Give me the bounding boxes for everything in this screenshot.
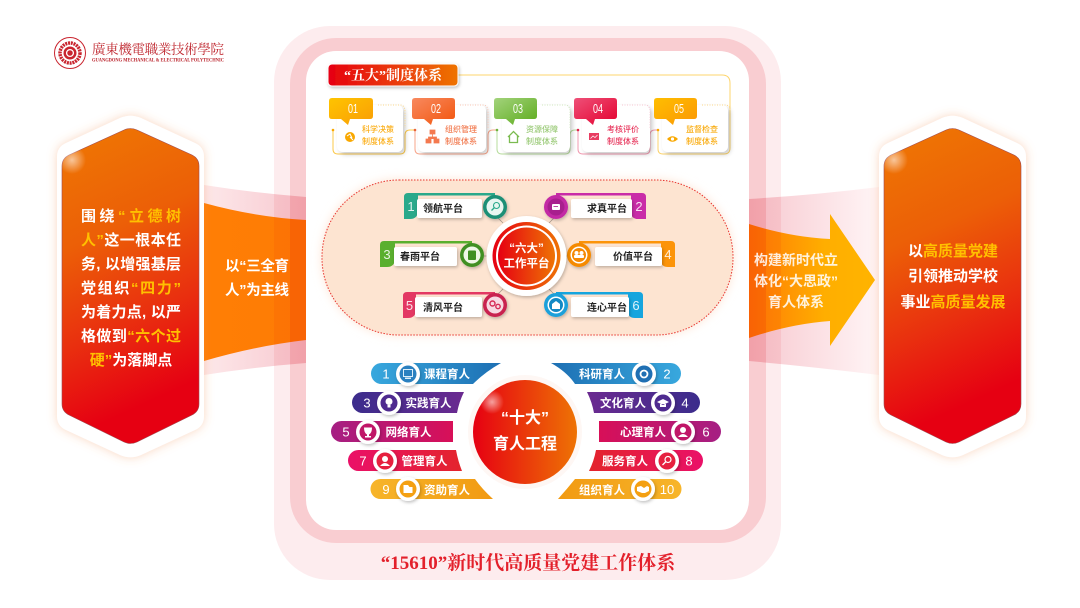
left panel text: 围绕“立德树	[81, 207, 181, 225]
right panel text	[900, 242, 1006, 311]
right arrow text: 构建新时代立	[754, 252, 838, 268]
project 3: 3	[363, 396, 371, 410]
platform 6: 6	[632, 298, 640, 313]
logo: GUANGDONG MECHANICAL & ELECTRICAL POLYTECHNIC	[92, 58, 224, 64]
right arrow text: 育人体系	[768, 294, 824, 310]
project 9	[370, 477, 493, 501]
platform 3	[380, 241, 484, 267]
card 04	[574, 98, 658, 154]
panel: five systems	[328, 64, 730, 154]
heading: five systems	[328, 64, 458, 86]
project 1	[371, 362, 501, 386]
connector line	[458, 75, 730, 154]
project 7: 管理育人	[402, 454, 448, 468]
card 03	[494, 98, 578, 154]
card 03: 制度体系	[526, 136, 558, 146]
project 8: 8	[685, 454, 693, 468]
platform 5: 5	[406, 298, 413, 313]
project 8: 服务育人	[602, 454, 648, 468]
project 6: 6	[702, 424, 710, 440]
hub connectors	[484, 212, 567, 300]
platform 1	[404, 193, 507, 219]
left band text: 以“三全育	[225, 257, 289, 275]
left panel text: 务, 以增强基层	[81, 255, 181, 273]
card 04: 制度体系	[607, 136, 639, 146]
right panel text: 引领推动学校	[908, 267, 998, 285]
left band text: 人”为主线	[225, 281, 290, 299]
project 5: 5	[342, 424, 350, 440]
left panel text	[81, 207, 181, 369]
platform 6: 连心平台	[587, 301, 627, 314]
project 4: 文化育人	[600, 396, 646, 410]
center hub: 工作平台	[504, 256, 550, 270]
card 01: 制度体系	[362, 136, 394, 146]
panel: six platforms	[322, 180, 733, 335]
project 2: 科研育人	[579, 367, 625, 381]
project 9: 资助育人	[424, 483, 470, 497]
logo	[54, 38, 224, 68]
platform 2: 求真平台	[587, 202, 627, 215]
project 4	[587, 391, 700, 415]
project 10	[558, 477, 682, 501]
central frame	[274, 26, 781, 580]
project 6: 心理育人	[620, 425, 666, 439]
platform 3: 3	[383, 247, 391, 262]
project 6	[599, 420, 721, 444]
card 01: 01	[348, 101, 358, 116]
right arrow text	[754, 252, 838, 310]
card 05: 05	[674, 101, 684, 116]
project 7: 7	[359, 454, 367, 468]
right panel text: 事业高质量发展	[900, 293, 1006, 311]
heading: five systems: “五大”制度体系	[344, 67, 443, 84]
card 02	[412, 98, 498, 154]
project 10: 组织育人	[579, 483, 625, 497]
project 3: 实践育人	[406, 396, 452, 410]
right panel text: 以高质量党建	[908, 242, 998, 260]
platform 4	[567, 241, 675, 267]
project 5: 网络育人	[386, 425, 432, 439]
right arrow text: 体化“大思政”	[754, 273, 838, 289]
card 01: 科学决策	[362, 124, 394, 134]
project 2	[551, 362, 681, 386]
project 3	[352, 391, 464, 415]
platform 2: 2	[635, 199, 643, 214]
center hub: “十大”	[501, 409, 549, 427]
platform 2	[544, 193, 646, 219]
project 4: 4	[681, 396, 689, 410]
center hub	[486, 216, 566, 296]
left panel text: 党组织“四力”	[81, 280, 181, 297]
card 02: 02	[431, 101, 441, 116]
project 10: 10	[660, 482, 674, 497]
project 7	[348, 449, 462, 473]
platform 3: 春雨平台	[400, 250, 440, 263]
project 2: 2	[663, 366, 671, 382]
left band text	[225, 257, 290, 299]
card 02: 制度体系	[445, 136, 477, 146]
left panel text: 为着力点, 以严	[81, 303, 181, 321]
card 03: 资源保障	[526, 124, 558, 134]
card 05: 监督检查	[686, 124, 718, 134]
platform 1: 1	[407, 199, 415, 214]
card 02: 组织管理	[445, 124, 477, 134]
platform 5	[403, 292, 507, 318]
card 03: 03	[513, 101, 523, 116]
platform 4: 价值平台	[613, 250, 653, 263]
project 9: 9	[382, 482, 390, 497]
card 01	[329, 98, 415, 154]
card 05: 制度体系	[686, 136, 718, 146]
center hub: 育人工程	[493, 434, 557, 453]
platform 4: 4	[664, 247, 672, 262]
right arrow band	[749, 187, 879, 375]
project 5	[331, 420, 453, 444]
card 04: 04	[593, 101, 603, 116]
title: “15610”新时代高质量党建工作体系	[381, 551, 676, 574]
platform 1: 领航平台	[423, 202, 463, 215]
left connector band	[204, 185, 306, 375]
panel: ten projects	[331, 362, 721, 501]
project 8	[589, 449, 703, 473]
center hub	[460, 367, 590, 497]
right hexagon panel	[879, 116, 1026, 457]
left panel text: 格做到“六个过	[81, 327, 181, 345]
card 05	[654, 98, 730, 154]
left hexagon panel	[57, 116, 204, 457]
platform 5: 清风平台	[423, 301, 463, 314]
project 1: 课程育人	[424, 367, 470, 381]
logo: 廣東機電職業技術學院	[92, 38, 224, 58]
left panel text: 人”这一根本任	[81, 231, 181, 249]
center hub: “六大”	[509, 241, 544, 255]
left panel text: 硬”为落脚点	[90, 351, 172, 369]
card 04: 考核评价	[607, 124, 639, 134]
project 1: 1	[382, 366, 390, 382]
peach background	[322, 180, 733, 335]
platform 6	[544, 292, 643, 318]
